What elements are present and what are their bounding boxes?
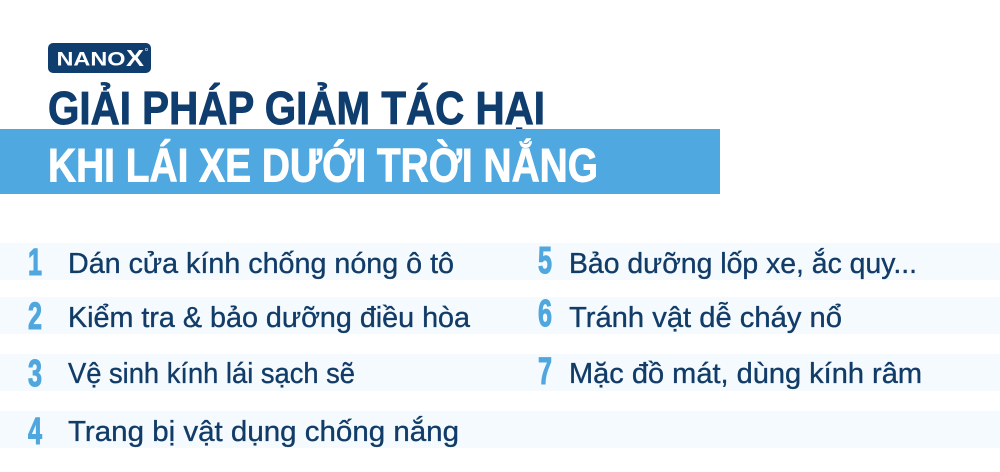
item 2: 2 bbox=[28, 296, 42, 338]
item 3 bbox=[28, 353, 355, 395]
item 4: Trang bị vật dụng chống nắng bbox=[68, 415, 459, 448]
item 4: 4 bbox=[28, 411, 42, 453]
row band 4 bbox=[0, 411, 1000, 448]
logo: NanoX badge: NANO bbox=[56, 50, 126, 70]
row band 3 bbox=[0, 354, 1000, 391]
logo: NanoX badge: X bbox=[126, 45, 145, 71]
row band 1 bbox=[0, 243, 1000, 280]
item 6: 6 bbox=[538, 293, 552, 335]
heading line 2 on blue banner: KHI LÁI XE DƯỚI TRỜI NẮNG bbox=[48, 138, 598, 192]
item 7: 7 bbox=[538, 351, 552, 393]
item 2 bbox=[28, 296, 471, 338]
item 2: Kiểm tra & bảo dưỡng điều hòa bbox=[68, 302, 471, 334]
item 7: Mặc đồ mát, dùng kính râm bbox=[569, 358, 922, 390]
item 6 bbox=[538, 293, 842, 335]
item 1: 1 bbox=[28, 242, 42, 284]
item 5: Bảo dưỡng lốp xe, ắc quy... bbox=[569, 247, 917, 280]
heading line 1: GIẢI PHÁP GIẢM TÁC HẠI bbox=[48, 82, 545, 134]
item 3: Vệ sinh kính lái sạch sẽ bbox=[68, 358, 355, 390]
item 6: Tránh vật dễ cháy nổ bbox=[569, 301, 842, 334]
logo: NanoX badge bbox=[48, 43, 151, 73]
item 5 bbox=[538, 240, 917, 282]
row band 2 bbox=[0, 297, 1000, 334]
item 3: 3 bbox=[28, 353, 42, 395]
item 1: Dán cửa kính chống nóng ô tô bbox=[68, 248, 454, 280]
item 4 bbox=[28, 411, 459, 453]
item 1 bbox=[28, 242, 454, 284]
item 5: 5 bbox=[538, 240, 552, 282]
